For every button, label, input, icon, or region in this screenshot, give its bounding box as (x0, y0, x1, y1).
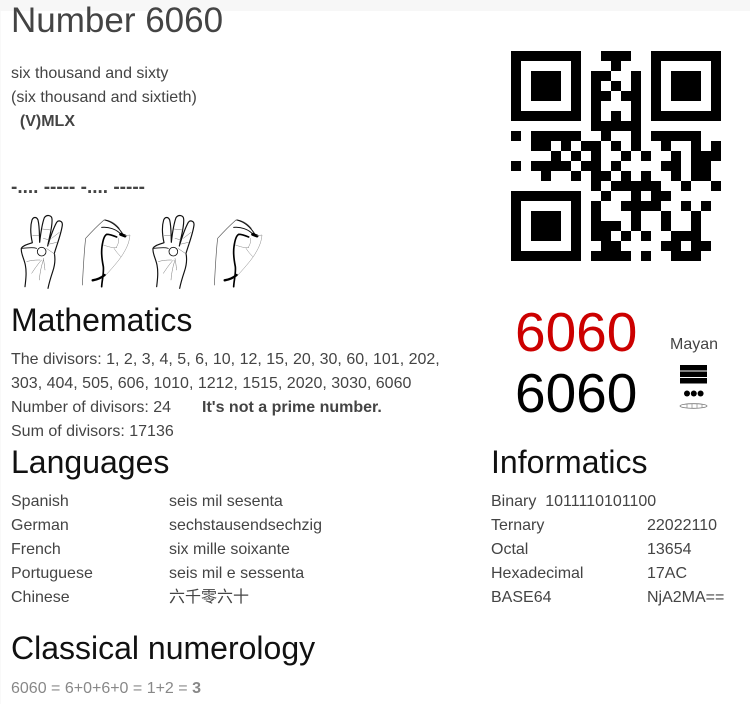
heading: Classical numerology: Classical numerology (11, 630, 315, 666)
table: informatics: 13654 (647, 541, 692, 558)
table: languages: Chinese (11, 589, 70, 606)
table: informatics: NjA2MA== (647, 589, 724, 606)
label: Mayan: Mayan (670, 336, 718, 353)
table: languages: French (11, 541, 61, 558)
table: languages (11, 493, 322, 606)
table: informatics: 17AC (647, 565, 687, 582)
text block: number in words: (six thousand and sixtieth) (11, 89, 197, 106)
table: languages: German (11, 517, 69, 534)
text block: number in words (11, 65, 197, 130)
black number: 6060 (515, 362, 637, 424)
table: informatics: Octal (491, 541, 528, 558)
text block: divisors: Number of divisors: 24 (11, 399, 171, 416)
table: informatics: Binary 1011110101100 (491, 493, 656, 510)
table: informatics: 22022110 (647, 517, 717, 534)
table: languages: Spanish (11, 493, 69, 510)
title: Number 6060 (11, 1, 223, 40)
text block: number in words: six thousand and sixty (11, 65, 168, 82)
red number: 6060 (515, 301, 637, 363)
text block: divisors (11, 351, 440, 440)
heading: Languages: Languages (11, 444, 169, 480)
text block: divisors: Sum of divisors: 17136 (11, 423, 174, 440)
text block: divisors: 303, 404, 505, 606, 1010, 1212, 1515, 2020, 3030, 6060 (11, 375, 411, 392)
QR code (511, 51, 721, 261)
table: languages: sechstausendsechzig (169, 517, 322, 534)
text block: divisors: The divisors: 1, 2, 3, 4, 5, 6, 10, 12, 15, 20, 30, 60, 101, 202, (11, 351, 440, 368)
heading: Informatics: Informatics (491, 444, 647, 480)
table: informatics (491, 493, 724, 606)
heading: Mathematics: Mathematics (11, 302, 192, 338)
table: languages: Portuguese (11, 565, 93, 582)
icon: Mayan numeral (680, 365, 708, 409)
table: languages: six mille soixante (169, 541, 290, 558)
table: languages: seis mil e sessenta (169, 565, 304, 582)
table: informatics: Hexadecimal (491, 565, 583, 582)
text block: divisors: It's not a prime number. (202, 399, 382, 416)
table: languages: 六千零六十 (169, 589, 249, 606)
text block: number in words: (V)MLX (20, 113, 75, 130)
table: informatics: Ternary (491, 517, 544, 534)
table: languages: seis mil sesenta (169, 493, 283, 510)
sign language hands (20, 214, 262, 289)
text block: numerology: 6060 = 6+0+6+0 = 1+2 = 3 (11, 680, 201, 697)
table: informatics: BASE64 (491, 589, 551, 606)
morse code: -.... ----- -.... ----- (11, 177, 145, 198)
